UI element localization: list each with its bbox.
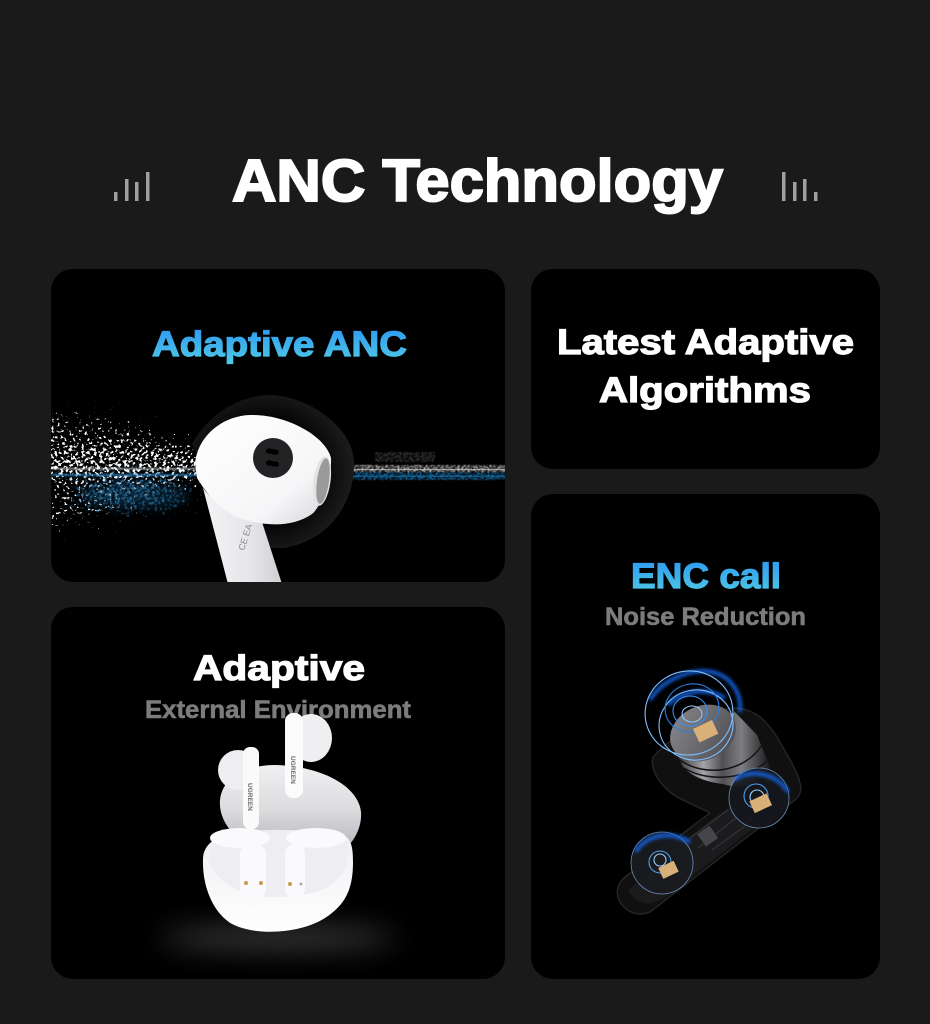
earbud body — [195, 415, 331, 524]
charging pins — [244, 881, 302, 886]
icon: right sound bars — [782, 172, 818, 201]
title: ANC Technology — [232, 148, 723, 214]
isolation halo — [192, 395, 354, 548]
noise particles — [30, 405, 210, 540]
pickup rings glow — [636, 671, 788, 852]
stem markings: CE EA — [236, 523, 254, 552]
right earbud: UGREEN — [289, 756, 296, 784]
driver cylinder — [675, 712, 770, 786]
driver top — [661, 694, 745, 772]
heading: ENC call: ENC call — [631, 557, 781, 596]
mid microphone disc — [729, 768, 789, 828]
main chip — [697, 826, 718, 847]
right earbud — [285, 713, 332, 798]
panel: adaptive external environment — [51, 607, 505, 979]
heading: Adaptive ANC: Adaptive ANC — [152, 325, 407, 364]
panel: ENC call noise reduction — [531, 494, 880, 979]
left earbud — [218, 747, 259, 829]
earbud stem — [203, 488, 282, 584]
speaker grille — [313, 456, 332, 506]
illustration: earbud with sound waves — [30, 395, 505, 584]
floor glow — [160, 927, 396, 949]
pickup rings — [637, 663, 768, 873]
bud slots — [210, 828, 346, 897]
earbud shell — [617, 708, 801, 914]
driver rings — [680, 745, 768, 777]
gold microphone chips — [658, 720, 772, 879]
circuit board — [628, 800, 775, 903]
filtered wave — [333, 452, 505, 480]
black sensor — [253, 438, 293, 478]
icon: left sound bars — [114, 172, 150, 201]
noise line — [51, 468, 201, 476]
panel: latest adaptive algorithms — [531, 269, 880, 469]
illustration: earbuds in charging case — [203, 713, 361, 932]
subheading: Noise Reduction: Noise Reduction — [605, 603, 806, 631]
lower microphone disc — [631, 832, 693, 894]
illustration: earbud cutaway with microphones — [617, 663, 801, 914]
case base — [203, 830, 353, 932]
blue noise haze — [80, 482, 190, 510]
left earbud: UGREEN — [246, 783, 253, 811]
case inner well — [209, 831, 348, 897]
blue particles — [40, 470, 210, 512]
board traces — [690, 810, 745, 850]
case lid — [220, 765, 361, 846]
subheading: External Environment: External Environment — [145, 696, 412, 724]
heading: Adaptive: Adaptive — [193, 649, 365, 688]
heading line 2: Algorithms — [599, 371, 811, 410]
heading line 1: Latest Adaptive — [557, 323, 854, 362]
panel: adaptive ANC — [30, 269, 505, 584]
